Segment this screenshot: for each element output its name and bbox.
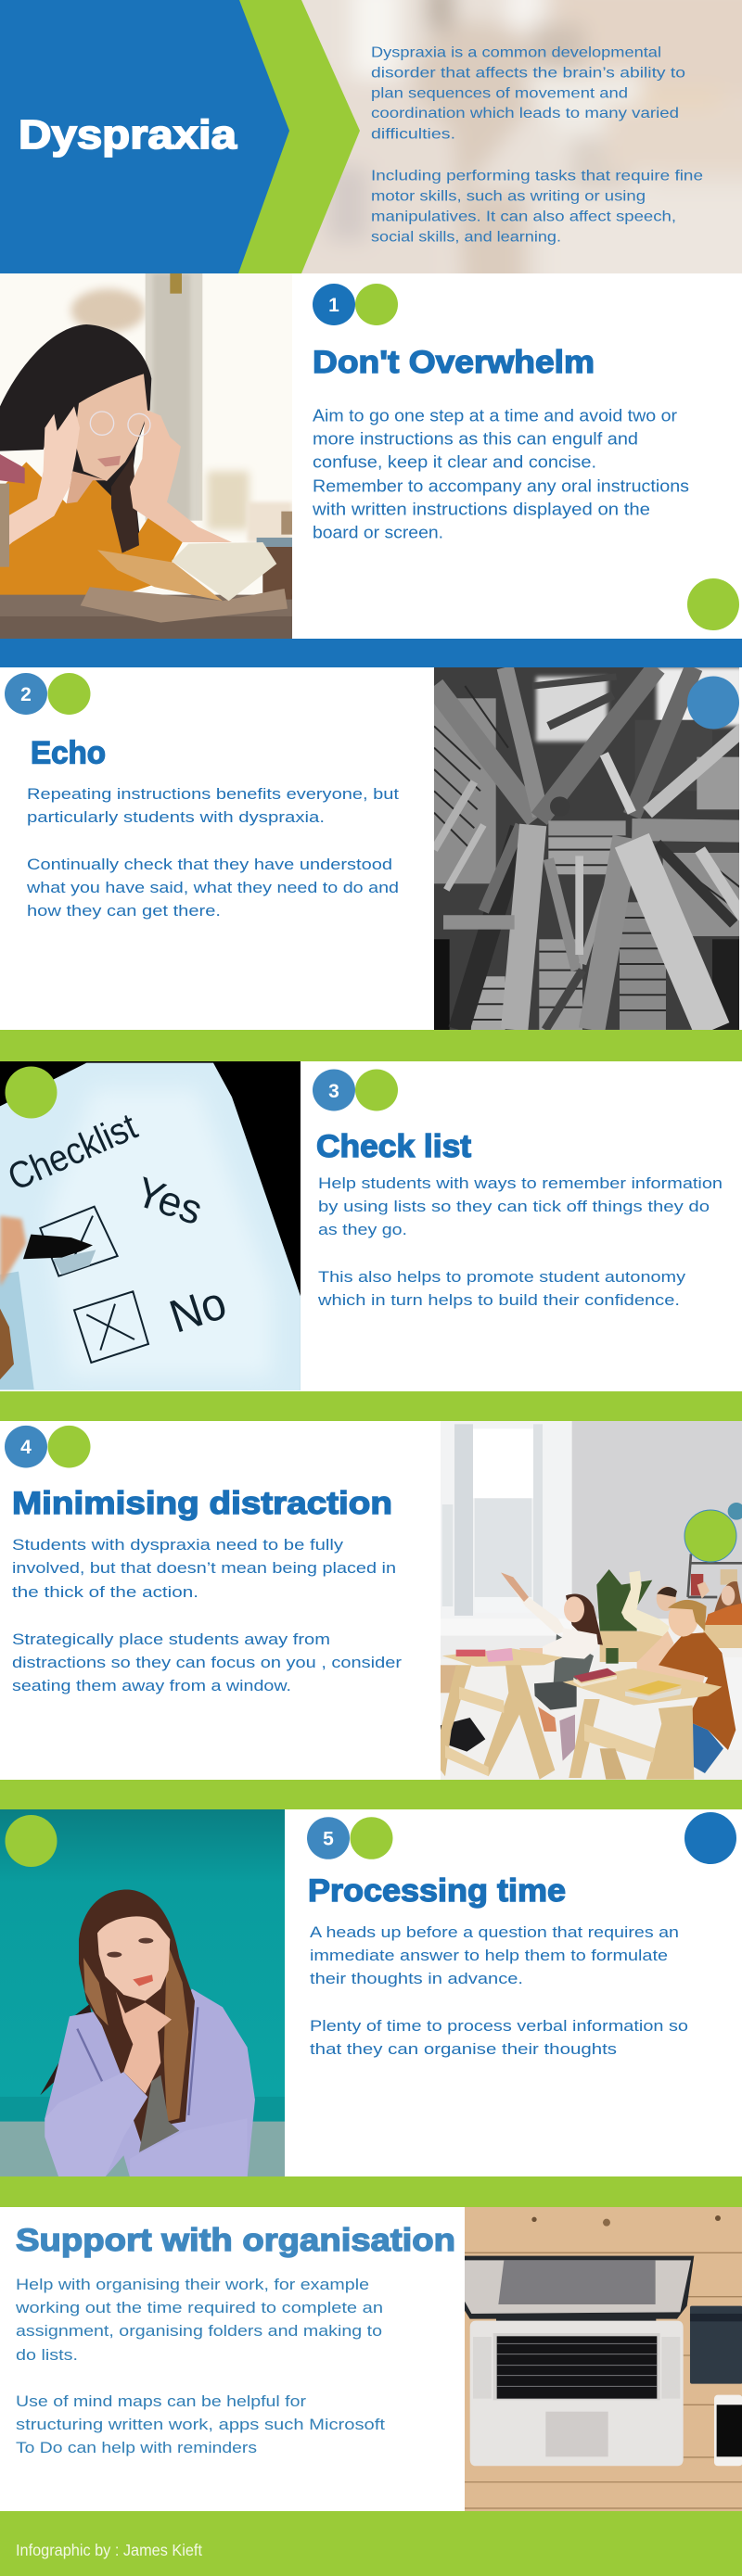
body text: with written instructions displayed on the	[312, 500, 650, 518]
photo: handwritten checklist	[0, 1061, 303, 1392]
decorative blue circle	[687, 677, 739, 729]
body text	[310, 1923, 688, 2058]
chevron: blue	[0, 0, 289, 273]
body text	[12, 1536, 402, 1694]
body text	[26, 785, 399, 920]
body text: Aim to go one step at a time and avoid two or	[313, 406, 677, 425]
body text: seating them away from a window.	[12, 1677, 291, 1694]
body text: Help with organising their work, for example	[16, 2276, 369, 2293]
decorative green circle	[6, 1066, 58, 1118]
body text: do lists.	[16, 2346, 78, 2364]
intro text: motor skills, such as writing or using	[371, 189, 646, 204]
panel: header	[0, 0, 742, 273]
body text: what you have said, what they need to do and	[26, 879, 399, 896]
band: blue divider	[0, 639, 742, 667]
decorative green circle	[684, 1510, 736, 1562]
chevron: green	[238, 0, 360, 273]
body text: assignment, organising folders and making to	[16, 2322, 382, 2340]
number badge 4: 4	[20, 1437, 32, 1458]
body text: Use of mind maps can be helpful for	[16, 2392, 306, 2410]
number badge 1: 1	[328, 295, 339, 316]
number badge 3: 3	[328, 1081, 339, 1102]
photo: thoughtful girl on teal background	[0, 1809, 286, 2177]
credit text: Infographic by : James Kieft	[16, 2541, 202, 2559]
photo: steel structure	[434, 667, 742, 1032]
body text: Help students with ways to remember information	[318, 1174, 723, 1192]
intro text: Including performing tasks that require fine	[371, 169, 703, 184]
intro text: manipulatives. It can also affect speech,	[371, 209, 676, 224]
photo: handwritten checklist: Checklist	[2, 1105, 143, 1199]
body text: immediate answer to help them to formulate	[310, 1947, 668, 1964]
decorative blue circle	[684, 1812, 736, 1864]
body text: distractions so they can focus on you , consider	[12, 1654, 402, 1671]
body text	[15, 2276, 385, 2456]
intro text: coordination which leads to many varied	[371, 106, 679, 121]
intro text: difficulties.	[371, 127, 455, 143]
photo: handwritten checklist: Yes	[130, 1168, 209, 1234]
body text: A heads up before a question that requires an	[310, 1923, 679, 1941]
heading: Support with organisation	[16, 2223, 455, 2258]
body text: particularly students with dyspraxia.	[27, 808, 325, 826]
band: green divider	[0, 1391, 742, 1421]
decorative green circle	[6, 1815, 58, 1867]
panel: 3 check list	[0, 1061, 723, 1392]
decorative green circle	[687, 578, 739, 630]
body text: working out the time required to complete an	[15, 2299, 383, 2316]
panel: 6 support with organisation	[15, 2207, 742, 2511]
footer	[0, 2511, 742, 2576]
heading: Processing time	[308, 1873, 566, 1909]
intro text	[371, 45, 703, 246]
body text: more instructions as this can engulf and	[313, 430, 638, 449]
body text: that they can organise their thoughts	[310, 2040, 617, 2058]
photo: laptop on wooden desk	[464, 2207, 742, 2511]
title: Dyspraxia	[19, 112, 237, 158]
body text: as they go.	[318, 1221, 407, 1238]
header background photo	[301, 0, 742, 273]
number badge 5: 5	[323, 1828, 334, 1850]
body text: by using lists so they can tick off things they do	[318, 1198, 710, 1215]
body text: Repeating instructions benefits everyone, but	[27, 785, 399, 803]
number badge 2	[5, 673, 91, 715]
band: green divider	[0, 1030, 742, 1061]
body text: Remember to accompany any oral instructions	[313, 476, 689, 495]
body text: how they can get there.	[27, 902, 221, 920]
body text: which in turn helps to build their confidence.	[317, 1291, 680, 1309]
intro text: plan sequences of movement and	[371, 85, 628, 101]
photo: classroom with raised hands	[436, 1421, 742, 1781]
intro text: Dyspraxia is a common developmental	[371, 45, 661, 61]
body text: Students with dyspraxia need to be fully	[12, 1536, 344, 1554]
intro text: social skills, and learning.	[371, 230, 561, 246]
band: green divider	[0, 1780, 742, 1809]
body text: Strategically place students away from	[12, 1631, 330, 1648]
body text: the thick of the action.	[12, 1583, 198, 1601]
number badge 5	[307, 1817, 393, 1859]
number badge 4	[5, 1426, 91, 1467]
body text	[312, 406, 689, 541]
panel: 1 don't overwhelm	[0, 273, 739, 639]
photo: woman reading with hands at temples	[0, 273, 294, 639]
body text: confuse, keep it clear and concise.	[313, 452, 596, 471]
panel: 4 minimising distraction	[5, 1421, 742, 1781]
body text: board or screen.	[313, 523, 443, 541]
body text: involved, but that doesn’t mean being placed in	[12, 1559, 396, 1577]
heading: Don't Overwhelm	[313, 345, 595, 380]
body text: their thoughts in advance.	[310, 1970, 523, 1987]
panel: 2 echo	[5, 667, 742, 1032]
body text: structuring written work, apps such Microsoft	[16, 2416, 385, 2433]
body text: Plenty of time to process verbal information so	[310, 2017, 688, 2035]
body text	[317, 1174, 723, 1309]
number badge 3	[313, 1070, 398, 1110]
intro text: disorder that affects the brain’s ability to	[371, 65, 685, 82]
body text: Continually check that they have understood	[27, 856, 392, 873]
number badge 2: 2	[20, 684, 32, 705]
heading: Echo	[31, 736, 106, 771]
heading: Minimising distraction	[12, 1486, 392, 1521]
band: green divider	[0, 2176, 742, 2207]
heading: Check list	[316, 1129, 471, 1164]
body text: This also helps to promote student autonomy	[318, 1268, 686, 1286]
number badge 1	[313, 284, 398, 325]
panel: 5 processing time	[0, 1809, 736, 2177]
body text: To Do can help with reminders	[16, 2439, 257, 2456]
photo: handwritten checklist: No	[163, 1276, 232, 1343]
